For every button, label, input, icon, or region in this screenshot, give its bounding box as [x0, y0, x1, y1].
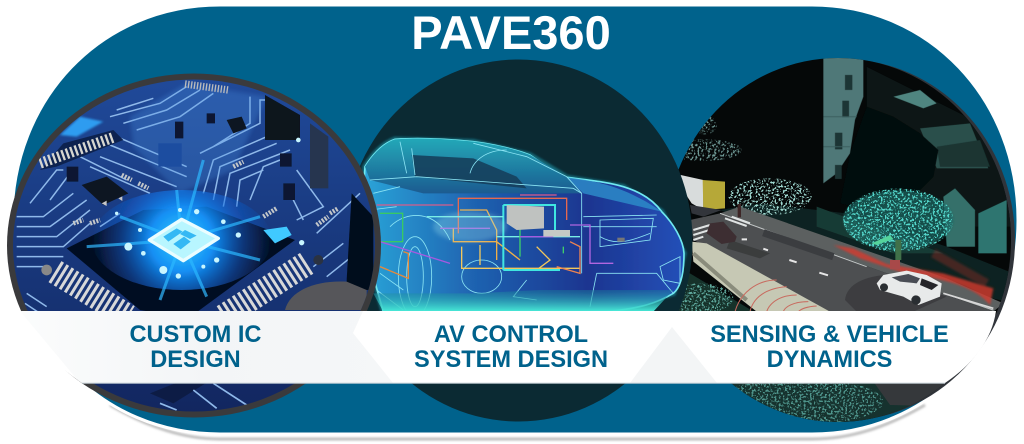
circle: AV control system design — [344, 60, 692, 422]
houses — [943, 188, 975, 247]
floor glow — [373, 290, 673, 312]
right translucent wedge — [630, 327, 717, 383]
left translucent overlay — [20, 311, 393, 383]
near sidewalk — [692, 242, 830, 312]
chip center — [149, 219, 218, 261]
wireframe car — [363, 139, 684, 317]
circle background — [344, 60, 692, 422]
lower scene — [732, 383, 910, 422]
panel drop shadow — [110, 405, 925, 439]
dark trees and background — [867, 67, 1013, 227]
hood — [567, 177, 662, 212]
dark car — [707, 222, 737, 244]
small parts — [73, 162, 338, 225]
verge — [720, 203, 1013, 303]
circle: sensing and vehicle dynamics — [678, 58, 1015, 422]
lower board — [150, 383, 207, 403]
car glow — [363, 139, 684, 312]
dark components — [82, 177, 128, 205]
top connector — [185, 84, 228, 90]
central light haze — [433, 212, 507, 242]
red lidar streak — [833, 245, 993, 305]
sidewalk far — [720, 207, 1003, 312]
caption: sensing and vehicle dynamics: DYNAMICS — [767, 347, 892, 373]
car body — [363, 139, 684, 312]
caption: custom IC design: CUSTOM IC — [130, 322, 261, 348]
lower lawn — [679, 273, 752, 311]
caption: custom IC design: DESIGN — [150, 347, 241, 373]
pedestrian — [738, 204, 741, 217]
circuit board — [13, 80, 375, 412]
circle: custom IC design — [0, 70, 390, 420]
lidar street scene — [678, 58, 1011, 422]
pins — [55, 272, 128, 317]
road — [690, 213, 993, 312]
bright nodes — [115, 138, 304, 279]
caption: AV control system design: AV CONTROL — [434, 322, 588, 348]
title: PAVE360 — [411, 6, 611, 59]
rear buildings — [893, 90, 937, 108]
speckled trees — [728, 178, 812, 215]
road markings — [742, 238, 828, 276]
grey blob — [285, 281, 367, 310]
system wiring — [377, 195, 613, 278]
band base — [20, 311, 1000, 383]
body outlines — [370, 142, 680, 317]
chip glow — [92, 190, 272, 290]
greenhouse — [365, 139, 582, 193]
building — [823, 53, 863, 183]
circle rim — [7, 74, 381, 418]
label band — [20, 311, 1000, 384]
white car — [877, 271, 942, 305]
truck — [681, 175, 703, 210]
band shadow — [82, 382, 945, 384]
car shadow — [845, 275, 947, 312]
caption: AV control system design: SYSTEM DESIGN — [414, 347, 608, 373]
left connector — [40, 130, 123, 170]
control unit — [507, 205, 544, 230]
caption: sensing and vehicle dynamics: SENSING & VEHICLE — [710, 322, 949, 348]
foreground dark tree — [850, 106, 938, 204]
circle rim — [671, 59, 1015, 421]
main chip — [67, 207, 295, 318]
top hazy area — [130, 83, 267, 193]
circuit traces — [17, 87, 360, 313]
